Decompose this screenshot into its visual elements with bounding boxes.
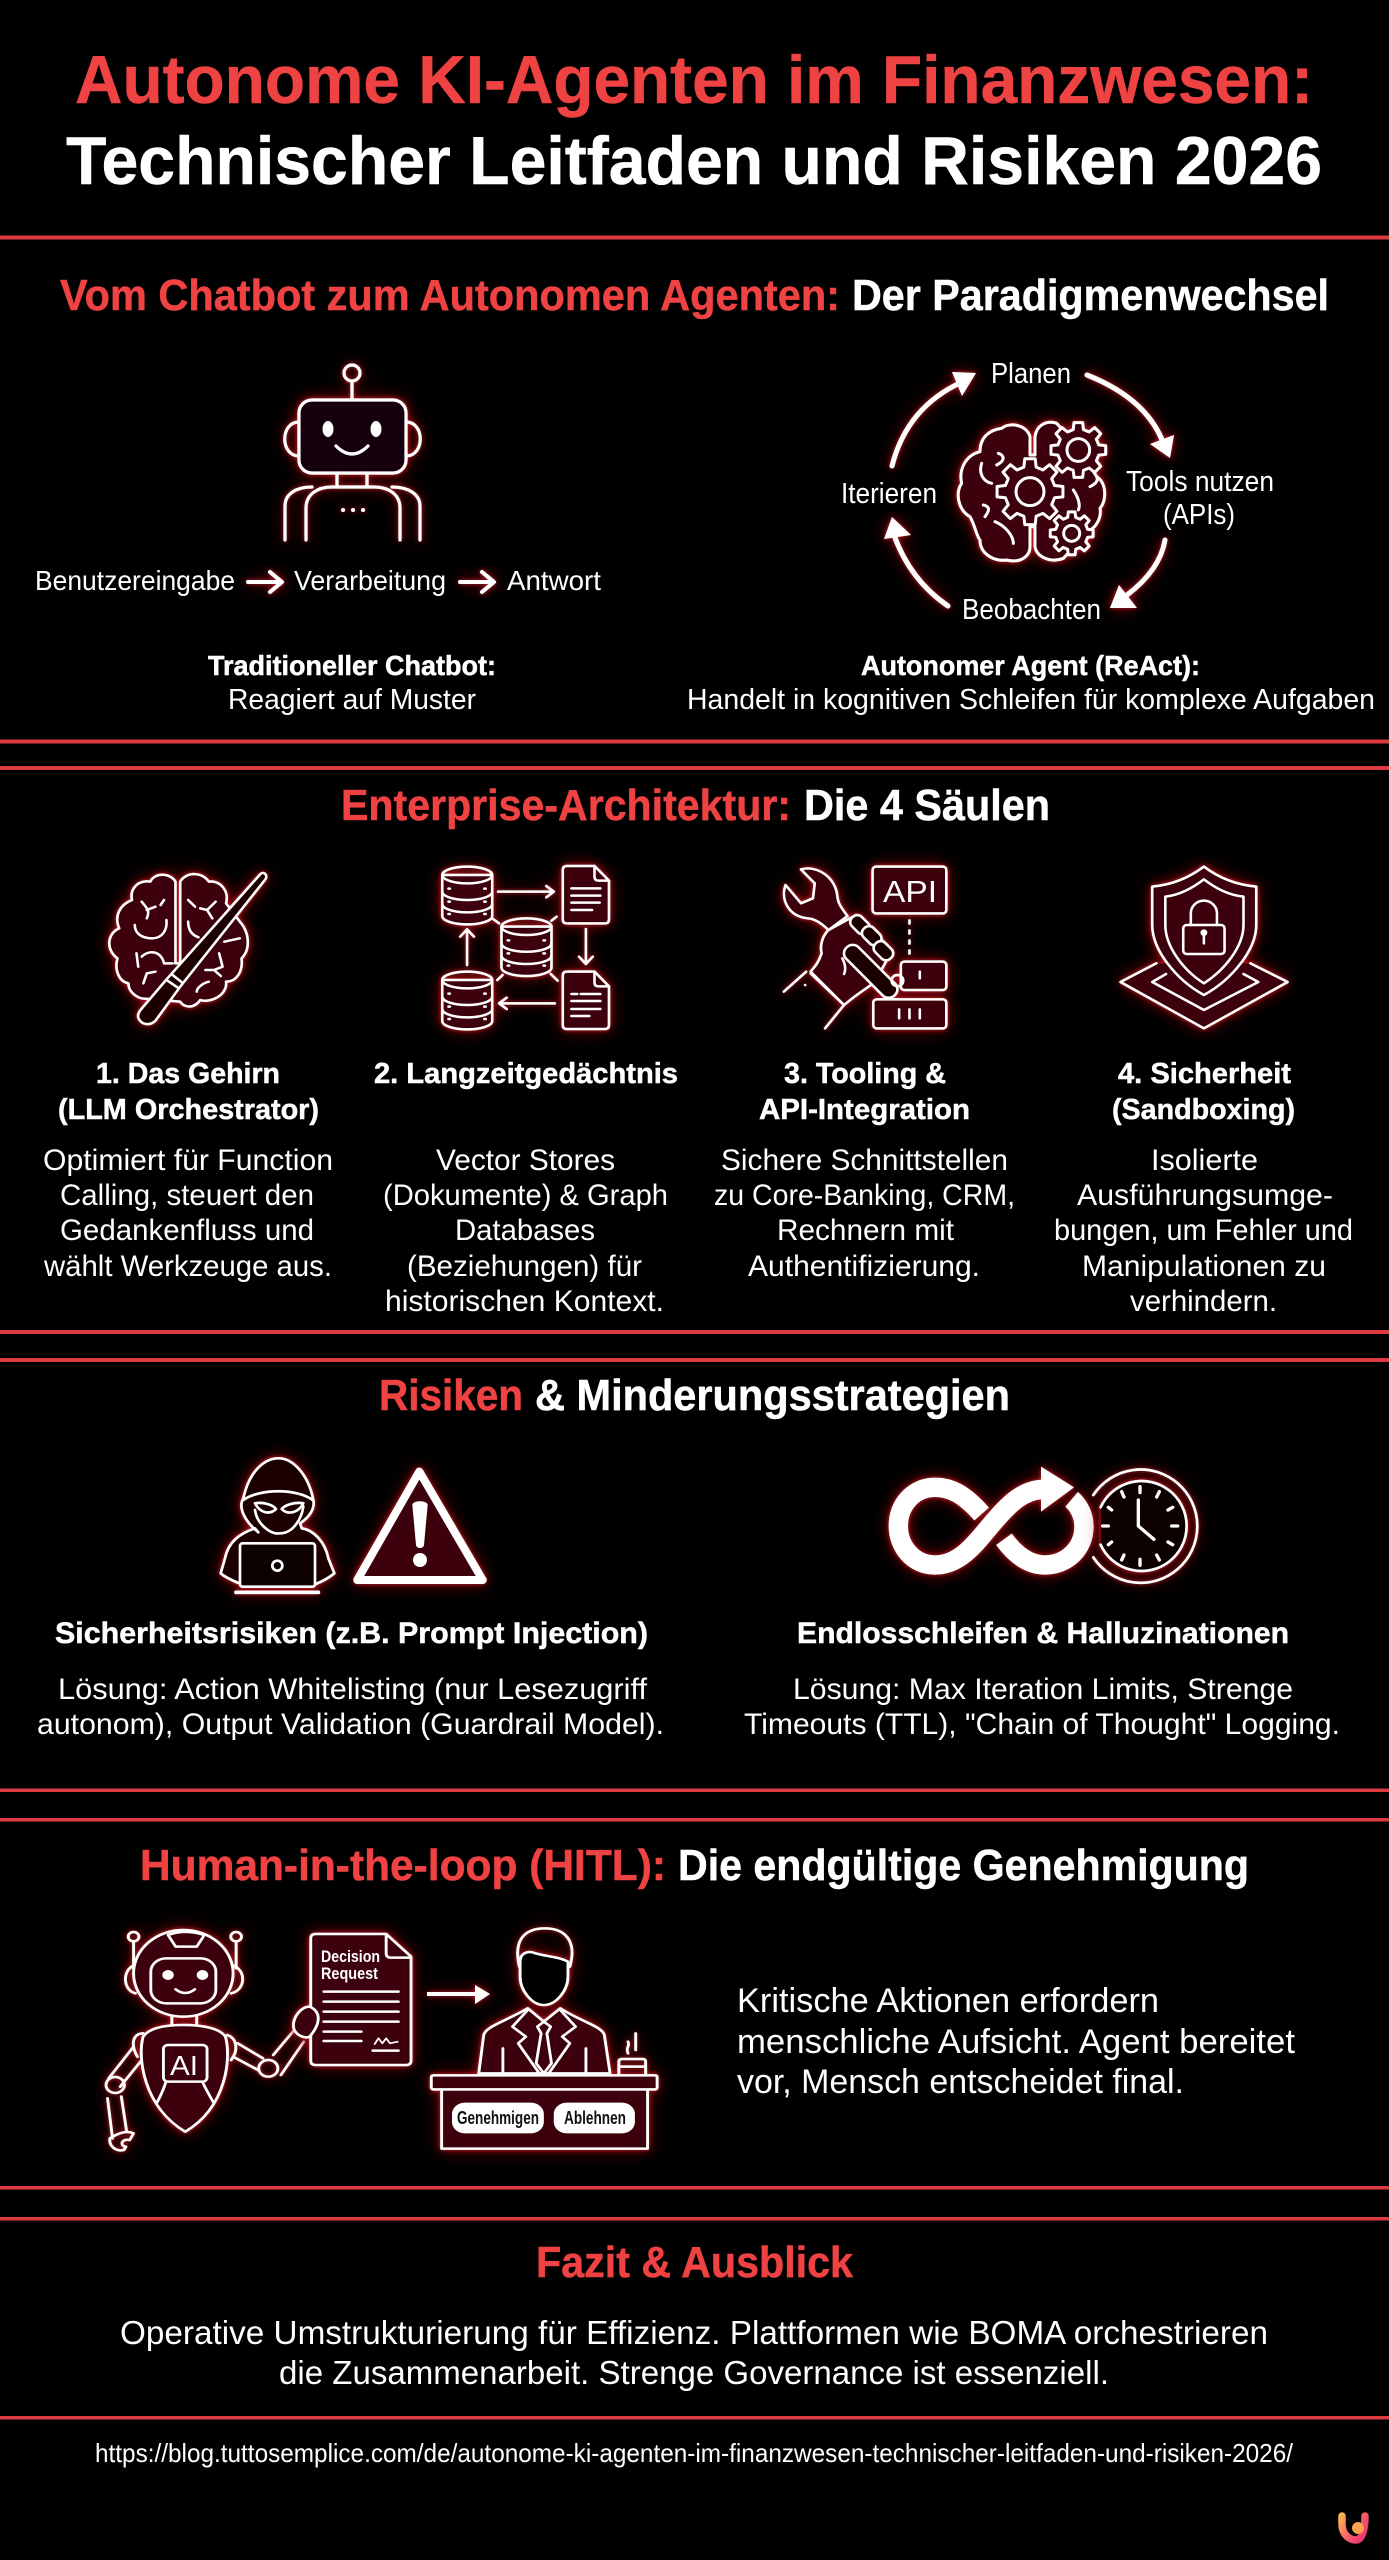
icon: shield and sandbox <box>1121 867 1288 1028</box>
pillar 4 text: Manipulationen zu <box>1082 1250 1326 1283</box>
pillar 2 text: Databases <box>455 1214 595 1247</box>
pillar 4 text: Ausführungsumge- <box>1077 1179 1333 1212</box>
pillar 3 text: Authentifizierung. <box>748 1250 980 1283</box>
pillar 1 text: Calling, steuert den <box>60 1179 314 1212</box>
panel: risks and mitigation <box>37 1371 1340 1741</box>
pillar 3 text <box>714 1144 1015 1283</box>
HITL text: Kritische Aktionen erfordern <box>737 1982 1159 2020</box>
document title: Decision <box>321 1947 380 1966</box>
pillar 2 text: (Dokumente) & Graph <box>383 1179 668 1212</box>
chatbot flow: Antwort <box>507 565 601 596</box>
risk card: loops <box>744 1467 1340 1741</box>
pillar 4 heading <box>1112 1058 1295 1126</box>
cycle labels: Beobachten <box>962 594 1101 626</box>
risk card text: Lösung: Max Iteration Limits, Strenge <box>793 1673 1293 1706</box>
risk card text: Timeouts (TTL), "Chain of Thought" Logging. <box>744 1708 1340 1741</box>
risk card text <box>37 1673 664 1741</box>
icon: decision request document <box>293 1934 411 2065</box>
icon: clock <box>1093 1469 1197 1583</box>
pillar 4 text: Isolierte <box>1151 1144 1258 1177</box>
panel: conclusion <box>120 2238 1268 2391</box>
cycle labels: (APIs) <box>1163 499 1235 531</box>
cycle labels <box>841 358 1274 626</box>
pillar 1 text <box>43 1144 333 1283</box>
pillar 3 heading <box>759 1058 970 1126</box>
icon: human approver at desk <box>431 1928 657 2149</box>
cycle labels: Tools nutzen <box>1126 466 1274 498</box>
HITL text: menschliche Aufsicht. Agent bereitet <box>737 2023 1296 2061</box>
risk card text: autonom), Output Validation (Guardrail Model). <box>37 1708 664 1741</box>
pillar 4 text: verhindern. <box>1130 1285 1277 1318</box>
title: Autonome KI-Agenten im Finanzwesen: <box>75 42 1313 118</box>
chatbot flow: Benutzereingabe <box>35 565 235 596</box>
arrow: request to human <box>427 1985 490 2004</box>
conclusion text: Operative Umstrukturierung für Effizienz. Plattformen wie BOMA orchestrieren <box>120 2314 1268 2351</box>
conclusion text <box>120 2314 1268 2391</box>
panel: enterprise architecture <box>43 781 1353 1318</box>
HITL text <box>737 1982 1296 2101</box>
pillar 1 text: Gedankenfluss und <box>60 1214 314 1247</box>
pillar 3 text: zu Core-Banking, CRM, <box>714 1179 1015 1212</box>
button: Genehmigen: Genehmigen <box>457 2108 539 2128</box>
document title: Request <box>321 1964 378 1983</box>
pillar 2 text: historischen Kontext. <box>385 1285 664 1318</box>
cycle labels: Iterieren <box>841 478 937 510</box>
icon: infinity loop <box>898 1467 1084 1565</box>
pillar 1 text: wählt Werkzeuge aus. <box>43 1250 332 1283</box>
risk card title: Endlosschleifen & Halluzinationen <box>797 1617 1289 1650</box>
pillar 3 heading: 3. Tooling & <box>784 1058 946 1090</box>
chatbot caption: Traditioneller Chatbot: <box>208 650 496 681</box>
AI chest label: AI <box>170 2050 198 2081</box>
heading: four pillars <box>341 781 1050 830</box>
document title <box>321 1947 380 1983</box>
heading: risks: & Minderungsstrategien <box>535 1371 1010 1420</box>
pillar 4: security <box>1054 867 1353 1318</box>
panel: human in the loop <box>106 1841 1296 2150</box>
chatbot caption <box>208 650 496 716</box>
API label: API <box>883 874 937 909</box>
icon: chatbot robot <box>285 365 420 540</box>
pillar 2 heading: 2. Langzeitgedächtnis <box>374 1058 678 1090</box>
heading: paradigm shift: Der Paradigmenwechsel <box>852 271 1329 320</box>
arrow: input to processing <box>248 572 282 592</box>
pillar 1: brain <box>43 873 333 1283</box>
pillar 2 text: Vector Stores <box>436 1144 615 1177</box>
chatbot flow: Verarbeitung <box>294 565 446 596</box>
agent caption <box>687 650 1375 716</box>
title <box>66 42 1322 199</box>
icon: wrench and API <box>784 867 946 1028</box>
button: Ablehnen: Ablehnen <box>564 2108 626 2128</box>
icon: brain with wand <box>109 873 266 1024</box>
risk card title: Sicherheitsrisiken (z.B. Prompt Injection) <box>55 1617 648 1650</box>
icon: AI robot <box>106 1930 304 2150</box>
pillar 4 heading: (Sandboxing) <box>1112 1094 1295 1126</box>
pillar 1 heading <box>58 1058 319 1126</box>
heading: paradigm shift: Vom Chatbot zum Autonomen Agenten: <box>60 271 840 320</box>
heading: HITL <box>140 1841 1249 1890</box>
source URL: https://blog.tuttosemplice.com/de/autonome-ki-agenten-im-finanzwesen-technischer-leitfaden-und-risiken-2026/ <box>95 2438 1294 2468</box>
pillar 3 text: Sichere Schnittstellen <box>721 1144 1008 1177</box>
risk card text: Lösung: Action Whitelisting (nur Lesezugriff <box>58 1673 648 1706</box>
heading: HITL: Die endgültige Genehmigung <box>678 1841 1249 1890</box>
chatbot flow <box>35 565 601 596</box>
title: Technischer Leitfaden und Risiken 2026 <box>66 123 1322 199</box>
pillar 3: tooling <box>714 867 1015 1283</box>
risk card text <box>744 1673 1340 1741</box>
pillar 2 text <box>383 1144 668 1318</box>
heading: conclusion: Fazit & Ausblick <box>536 2238 853 2287</box>
pillar 1 heading: 1. Das Gehirn <box>96 1058 280 1090</box>
illustration: agent to human approval <box>106 1928 657 2150</box>
icon: warning triangle <box>357 1472 483 1580</box>
arrow: processing to answer <box>460 572 494 592</box>
chatbot caption: Reagiert auf Muster <box>228 684 476 716</box>
pillar 3 text: Rechnern mit <box>777 1214 955 1247</box>
icon: brain with gears <box>958 422 1106 561</box>
HITL text: vor, Mensch entscheidet final. <box>737 2063 1184 2101</box>
cycle labels: Planen <box>991 358 1071 390</box>
heading: risks: Risiken <box>379 1371 523 1420</box>
agent caption: Handelt in kognitiven Schleifen für komplexe Aufgaben <box>687 684 1375 716</box>
agent caption: Autonomer Agent (ReAct): <box>861 650 1200 681</box>
pillar 2: memory <box>374 866 678 1318</box>
panel: paradigm shift <box>35 271 1375 716</box>
pillar 4 heading: 4. Sicherheit <box>1118 1058 1291 1090</box>
heading: HITL: Human-in-the-loop (HITL): <box>140 1841 666 1890</box>
heading: four pillars: Die 4 Säulen <box>804 781 1050 830</box>
icon: databases and documents <box>442 866 609 1029</box>
conclusion text: die Zusammenarbeit. Strenge Governance ist essenziell. <box>279 2354 1109 2391</box>
pillar 3 heading: API-Integration <box>759 1094 970 1126</box>
pillar 1 heading: (LLM Orchestrator) <box>58 1094 319 1126</box>
risk card: security <box>37 1458 664 1741</box>
pillar 4 text: bungen, um Fehler und <box>1054 1214 1353 1247</box>
pillar 4 text <box>1054 1144 1353 1318</box>
icon: hacker <box>221 1458 334 1592</box>
heading: four pillars: Enterprise-Architektur: <box>341 781 791 830</box>
cycle arrows <box>884 372 1174 608</box>
pillar 1 text: Optimiert für Function <box>43 1144 333 1177</box>
heading: paradigm shift <box>60 271 1329 320</box>
pillar 2 text: (Beziehungen) für <box>407 1250 642 1283</box>
icon: ReAct cycle <box>841 358 1274 626</box>
icon: brand logo <box>1342 2516 1365 2540</box>
